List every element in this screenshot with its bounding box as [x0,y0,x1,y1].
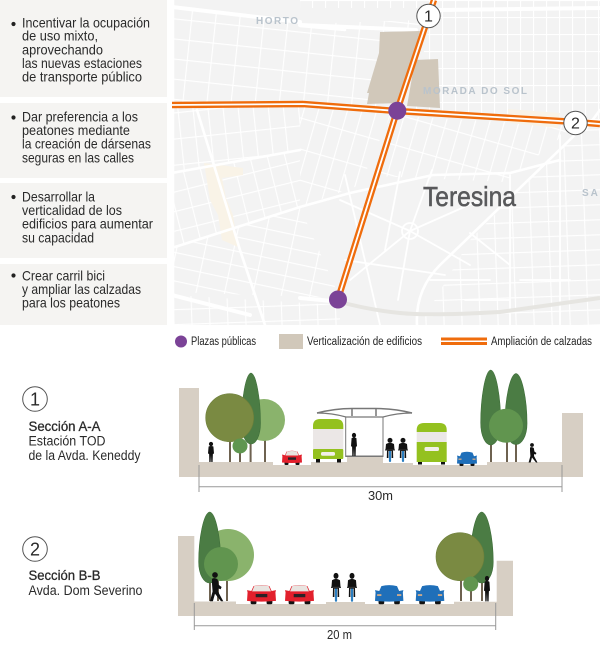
marker 2 [564,111,587,135]
panel: mixed use: aprovechando [22,41,103,57]
panel: mixed use: de uso mixto, [22,28,98,44]
blue car [457,452,477,466]
marker 1: 1 [424,8,433,26]
bus left [313,419,343,462]
marker 1 [417,4,440,28]
red cars [247,585,314,604]
legend: road widening [441,336,592,348]
dimension 20 m [194,603,496,642]
label: Teresina: Teresina [423,181,516,212]
legend: public squares [175,336,256,348]
panel: verticality [0,183,167,258]
pedestrian [208,442,214,462]
panel: verticality: su capacidad [22,229,94,245]
section B-B label: Avda. Dom Severino [28,583,142,598]
label: Horto: HORTO [256,16,298,27]
panel: pedestrian preference: la creación de dársenas [22,136,151,152]
panel: bike lanes: para los peatones [22,294,120,310]
ground and buildings [178,536,513,616]
map of Teresina [172,0,600,325]
public square: south [329,290,347,308]
section B-B diagram [178,512,513,642]
marker 2: 2 [571,116,580,132]
dimension 20 m: 20 m [327,628,352,642]
trees right [436,512,493,601]
section A-A label: Sección A-A [28,419,100,434]
trees left [199,512,254,601]
public square: north [388,102,406,120]
map: main streets [172,0,600,325]
section B-B label: Sección B-B [28,568,100,583]
panel: pedestrian preference: Dar preferencia a los [22,109,138,125]
panel: verticality: edificios para aumentar [22,216,153,232]
map: railway [340,298,600,314]
legend: verticalisation: Verticalización de edificios [307,336,422,348]
panel: mixed use: Incentivar la ocupación [22,14,150,30]
cyclists [385,438,408,462]
dimension 30 m [199,465,562,503]
legend [175,334,592,349]
section B-B label [23,537,143,598]
person at station [351,433,357,456]
pedestrian right [529,443,538,462]
road widening routes [172,0,600,299]
legend: verticalisation [279,334,422,349]
dimension 30 m: 30m [368,489,393,503]
section A-A label: Estación TOD [28,434,106,448]
panel: pedestrian preference: peatones mediante [22,122,130,138]
section B-B label: 2 [30,540,40,560]
panel: mixed use: de transporte público [22,69,142,85]
bus right [417,423,447,464]
label: Santa: SA [582,188,600,199]
pedestrian [210,572,223,601]
map: pale highlighted blocks [204,109,560,247]
panel: verticality: Desarrollar la [22,188,95,204]
pedestrian right [484,576,490,601]
legend: public squares: Plazas públicas [191,336,256,348]
section A-A label [23,387,141,463]
panel: bike lanes [0,264,167,325]
panel: bike lanes: y ampliar las calzadas [22,281,141,297]
section A-A label: de la Avda. Keneddy [28,448,141,463]
cyclists [331,573,357,602]
ground and buildings [179,388,583,477]
map: building verticalisation areas [367,31,440,108]
panel: mixed use: las nuevas estaciones [22,55,142,71]
red car [282,451,302,465]
trees right [481,370,527,462]
panel: pedestrian preference [0,103,167,178]
panel: verticality: verticalidad de los [22,202,122,218]
bus station shelter [317,408,412,457]
trees left [206,373,285,462]
panel: bike lanes: Crear carril bici [22,267,105,283]
label: Morada do Sol: MORADA DO SOL [423,86,527,97]
panel: measures list [0,0,167,325]
panel: mixed use [0,0,167,97]
panel: pedestrian preference: seguras en las calles [22,149,134,165]
section A-A label: 1 [30,390,40,410]
section A-A diagram [179,370,583,503]
blue cars [375,585,444,604]
